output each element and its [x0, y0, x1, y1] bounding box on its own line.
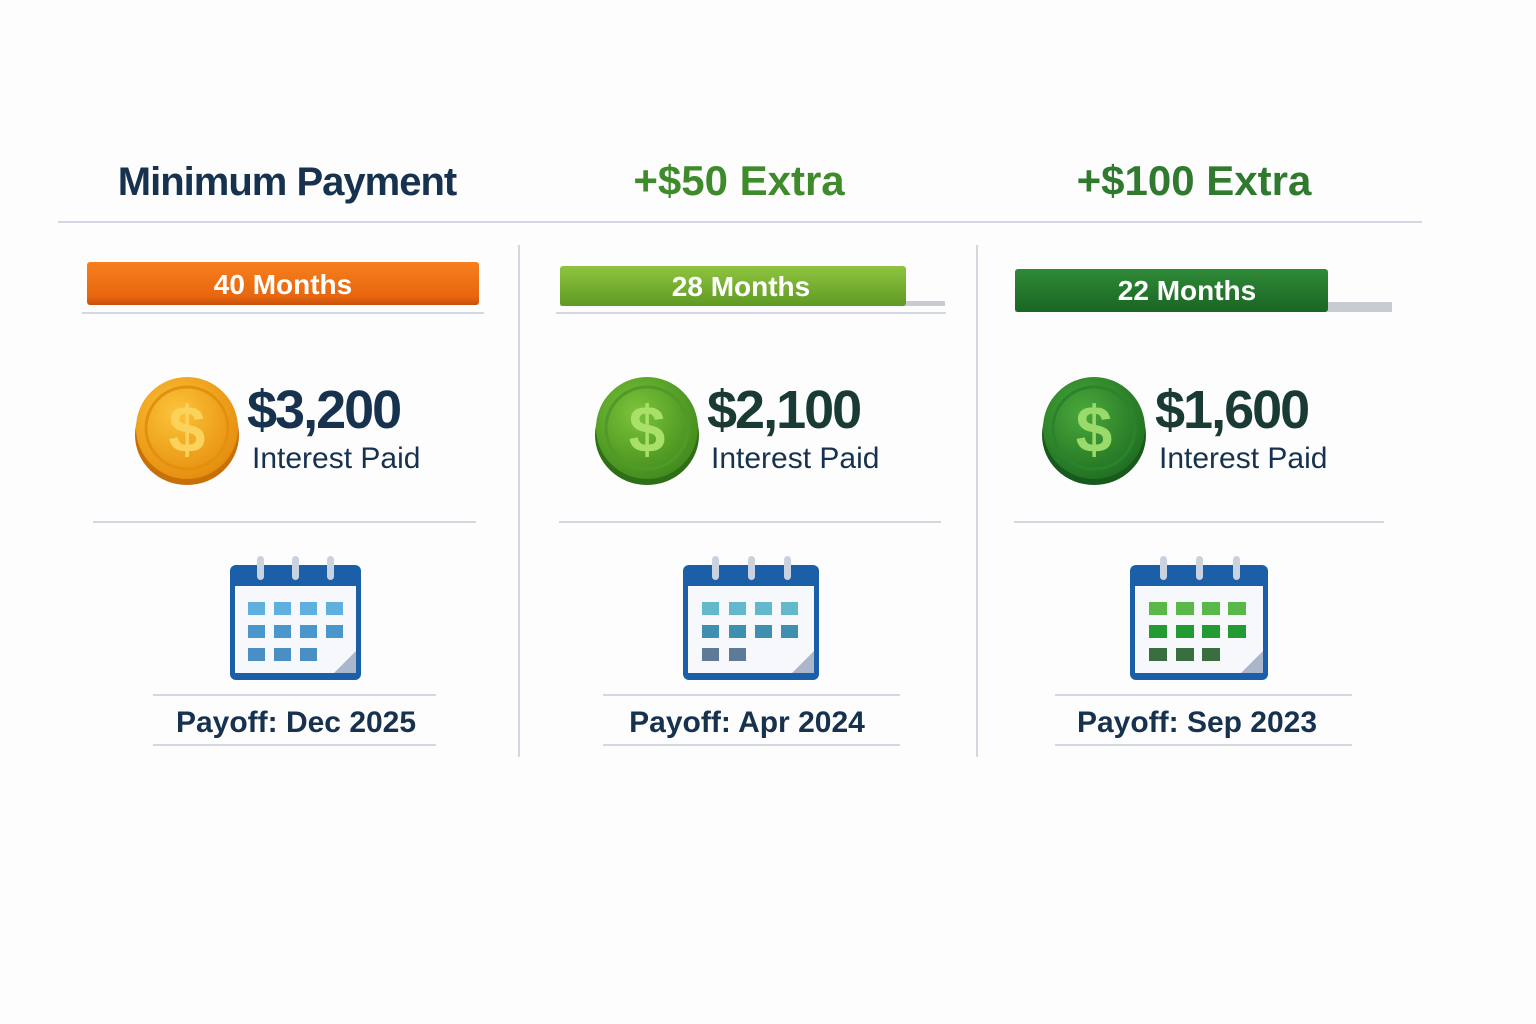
- heading: +$50 Extra: +$50 Extra: [633, 157, 845, 204]
- stat: $1,600 interest: [1155, 380, 1327, 475]
- stat: $2,100 interest: [707, 380, 879, 475]
- bar: 22 Months: [1015, 269, 1392, 312]
- stat: $2,100 interest: Interest Paid: [711, 442, 879, 475]
- payoff label 3: Payoff: Sep 2023: [1077, 706, 1317, 739]
- payoff label 1: Payoff: Dec 2025: [176, 706, 416, 739]
- bar: 28 Months: 28 Months: [672, 271, 810, 302]
- bar: 22 Months: 22 Months: [1118, 275, 1256, 306]
- icon: dark green coin: [1042, 377, 1146, 485]
- icon: dark green coin: $: [1076, 392, 1112, 466]
- stat: $2,100 interest: $2,100: [707, 380, 860, 440]
- bar: 40 Months: 40 Months: [214, 269, 352, 300]
- icon: gold coin: [135, 377, 239, 485]
- heading: Minimum Payment: Minimum Payment: [118, 160, 457, 204]
- heading: +$100 Extra: +$100 Extra: [1077, 157, 1312, 204]
- payoff label 2: Payoff: Apr 2024: [629, 706, 865, 739]
- divider lines: [58, 222, 1422, 757]
- icon: calendar 2: [683, 556, 819, 680]
- icon: light green coin: [595, 377, 699, 485]
- stat: $3,200 interest: Interest Paid: [252, 442, 420, 475]
- bar: 40 Months: [87, 262, 479, 305]
- icon: gold coin: $: [169, 392, 205, 466]
- bar: 28 Months: [560, 266, 945, 306]
- stat: $3,200 interest: [247, 380, 420, 475]
- icon: calendar 1: [230, 556, 361, 680]
- stat: $3,200 interest: $3,200: [247, 380, 400, 440]
- stat: $1,600 interest: $1,600: [1155, 380, 1308, 440]
- icon: light green coin: $: [629, 392, 665, 466]
- stat: $1,600 interest: Interest Paid: [1159, 442, 1327, 475]
- icon: calendar 3: [1130, 556, 1268, 680]
